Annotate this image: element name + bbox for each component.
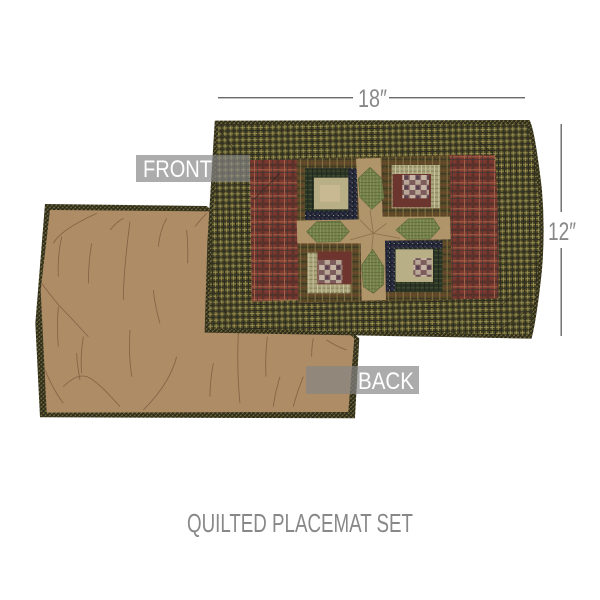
centre patchwork background — [297, 155, 452, 303]
back tan fabric — [41, 210, 354, 413]
green leaves — [307, 167, 440, 293]
quilting lines — [213, 130, 527, 337]
front placemat — [207, 122, 542, 337]
top-left log cabin block — [305, 168, 357, 220]
dimension: width 18 inches: 18″ — [358, 85, 387, 113]
label: front — [136, 155, 250, 183]
back placemat — [35, 204, 359, 418]
bottom-left log cabin block — [307, 252, 352, 293]
front plaid border — [207, 122, 542, 337]
back wrinkles — [42, 213, 347, 410]
label: back — [306, 366, 419, 395]
dimension: height 12 inches: 12″ — [548, 218, 576, 246]
top-right log cabin block — [392, 165, 440, 208]
cross creases — [350, 210, 400, 250]
tan cross — [297, 158, 451, 301]
caption: QUILTED PLACEMAT SET — [187, 508, 413, 538]
label: front: FRONT — [143, 156, 212, 183]
left red panel — [250, 159, 298, 302]
back binding — [35, 204, 359, 418]
right red panel — [448, 155, 499, 299]
bottom-right log cabin block — [385, 241, 442, 292]
label: back: BACK — [358, 368, 414, 395]
